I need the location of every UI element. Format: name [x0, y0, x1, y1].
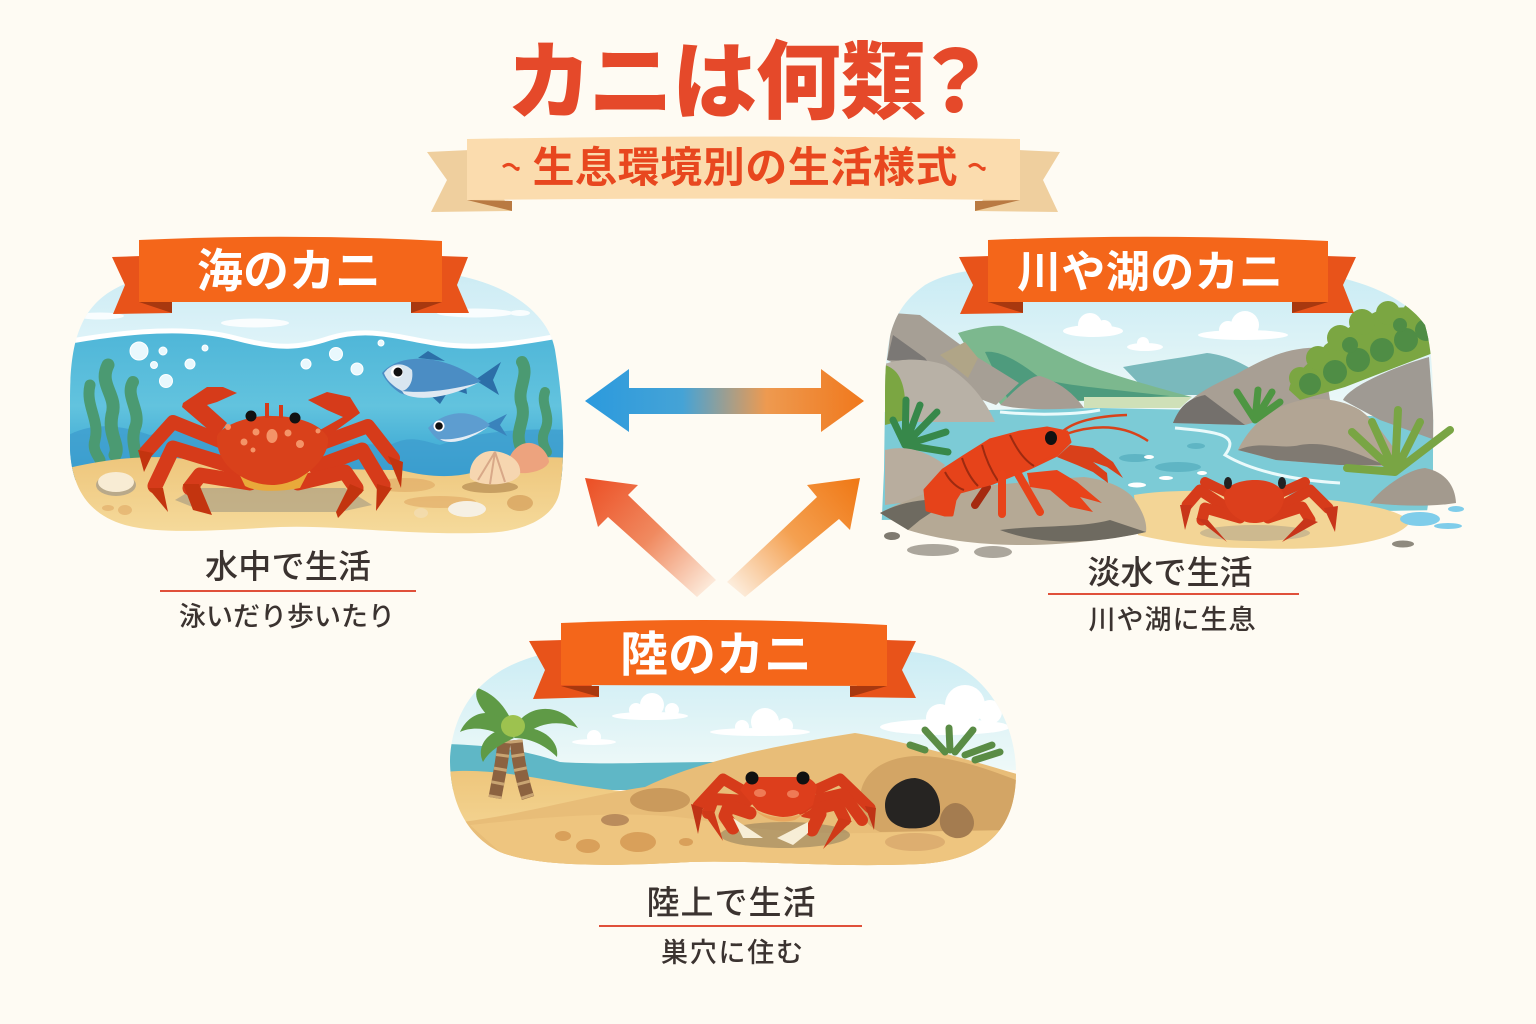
fish large — [382, 351, 501, 404]
palm leaves — [460, 688, 578, 762]
water sparkles — [1128, 455, 1207, 488]
palm coconut — [501, 715, 525, 737]
wave crest — [60, 331, 570, 346]
burrow mound — [860, 756, 1016, 832]
caption: land — [599, 884, 862, 968]
land crab cheeks — [754, 789, 799, 798]
carapace underside — [240, 472, 308, 491]
river crab legs — [1187, 482, 1328, 520]
middle rock — [1238, 399, 1406, 467]
lobster segments — [945, 435, 1034, 490]
right claw — [308, 392, 360, 437]
big foreground rock — [880, 477, 1146, 545]
caption: sea: 泳いだり歩いたり — [179, 602, 395, 632]
right leg tips — [336, 456, 403, 518]
panel: sea scene — [70, 276, 564, 534]
river sky — [880, 265, 1440, 415]
caption: river: 川や湖に生息 — [1088, 605, 1256, 635]
land crab body — [740, 777, 817, 817]
seashell stones — [96, 472, 486, 517]
caption: land: 陸上で生活 — [646, 884, 816, 921]
dune — [462, 733, 1020, 870]
palm trunks — [495, 740, 528, 798]
right legs — [298, 426, 393, 488]
scallop shells — [462, 443, 549, 493]
lobster lower claw — [1027, 470, 1102, 512]
burrow dirt — [940, 803, 974, 838]
sand shading — [102, 478, 533, 518]
sea crab — [138, 387, 403, 518]
arrow: land to sea — [585, 478, 716, 597]
rock right shore — [1370, 468, 1456, 506]
land crab middle legs — [708, 794, 862, 820]
ribbon: land heading — [529, 620, 916, 699]
far bank — [1084, 397, 1192, 408]
clouds on river — [1063, 311, 1288, 351]
river currents — [1000, 410, 1340, 483]
clouds on sea — [76, 308, 530, 328]
grass behind dune — [910, 728, 1000, 760]
bubbles — [130, 340, 384, 388]
lobster upper claw — [1057, 445, 1123, 483]
land crab shadow — [720, 822, 850, 848]
land crab arms — [725, 806, 820, 830]
left claw — [182, 387, 237, 437]
caption: river — [1048, 554, 1299, 635]
pebbles — [884, 532, 1414, 558]
left leg tips — [138, 450, 212, 515]
title: カニは何類？ — [510, 36, 985, 131]
water darker ripples — [1119, 443, 1205, 472]
reeds left — [893, 400, 948, 452]
river crab — [1180, 477, 1338, 542]
sea sky — [76, 276, 552, 344]
lobster legs — [1002, 474, 1040, 514]
caption: land: 巣穴に住む — [661, 938, 803, 968]
double arrow: sea and river — [585, 369, 864, 432]
distant seabed hills — [60, 426, 570, 480]
lower left rock — [885, 448, 945, 505]
ribbon: sea heading: 海のカニ — [197, 245, 381, 297]
lobster dark leg — [975, 487, 987, 505]
ribbon: sea heading — [112, 237, 469, 314]
caption: river: 淡水で生活 — [1088, 554, 1252, 591]
shell spots — [225, 424, 320, 452]
land crab eyes — [746, 772, 810, 784]
ribbon: river heading: 川や湖のカニ — [1017, 248, 1283, 297]
burrow hole — [885, 778, 940, 828]
far mountains — [1123, 353, 1253, 395]
land crab middle tips — [702, 811, 852, 849]
land sand blotches — [555, 788, 945, 853]
land crab outer legs — [698, 779, 870, 808]
ribbon: land heading: 陸のカニ — [620, 629, 812, 682]
green mountain — [958, 326, 1192, 404]
lobster tail and body — [925, 428, 1070, 515]
bush right — [1289, 301, 1437, 400]
left legs — [146, 422, 250, 488]
crab shadow — [175, 488, 372, 512]
land sea — [445, 744, 720, 790]
subtitle ribbon — [427, 136, 1060, 212]
shore sand — [1134, 491, 1410, 549]
palm trunk bands — [495, 740, 528, 798]
panel: land scene — [445, 640, 1020, 870]
river crab shadow — [1200, 525, 1310, 541]
reeds centre — [1237, 390, 1280, 420]
lobster antennae — [1062, 415, 1148, 441]
river water — [880, 408, 1440, 520]
dune foreground — [470, 815, 1020, 870]
subtitle ribbon: 生息環境別の生活様式 — [532, 144, 958, 191]
beach — [445, 771, 1020, 868]
ribbon: river heading — [959, 237, 1356, 314]
eyes — [246, 410, 300, 424]
rocks left — [885, 313, 1084, 422]
seaweed right — [519, 362, 547, 452]
arrow: land to river — [727, 478, 860, 597]
reeds right — [1347, 410, 1450, 472]
lobster — [925, 415, 1148, 515]
river crab body — [1224, 480, 1284, 523]
caption: sea: 水中で生活 — [205, 548, 371, 585]
seaweed left — [89, 365, 137, 460]
land crab underside — [755, 808, 812, 822]
land crab outer tips — [691, 804, 876, 834]
river crab eyes — [1224, 477, 1286, 489]
eye stalks — [265, 403, 283, 418]
river crab leg tips — [1180, 505, 1338, 542]
caption: sea — [160, 548, 416, 632]
right rock — [1343, 357, 1435, 440]
puddles — [1400, 506, 1464, 529]
sea floor sand — [72, 457, 563, 534]
fish small — [428, 413, 507, 442]
land crab — [691, 772, 876, 849]
panel: river scene — [880, 265, 1464, 558]
land sky — [445, 640, 1020, 770]
lobster eye — [1045, 431, 1057, 445]
light reeds left — [885, 365, 905, 425]
land crab white claws — [733, 818, 808, 845]
land clouds — [572, 685, 1010, 745]
big right rocks — [1173, 348, 1330, 425]
carapace — [217, 416, 328, 485]
sea water — [60, 333, 570, 480]
